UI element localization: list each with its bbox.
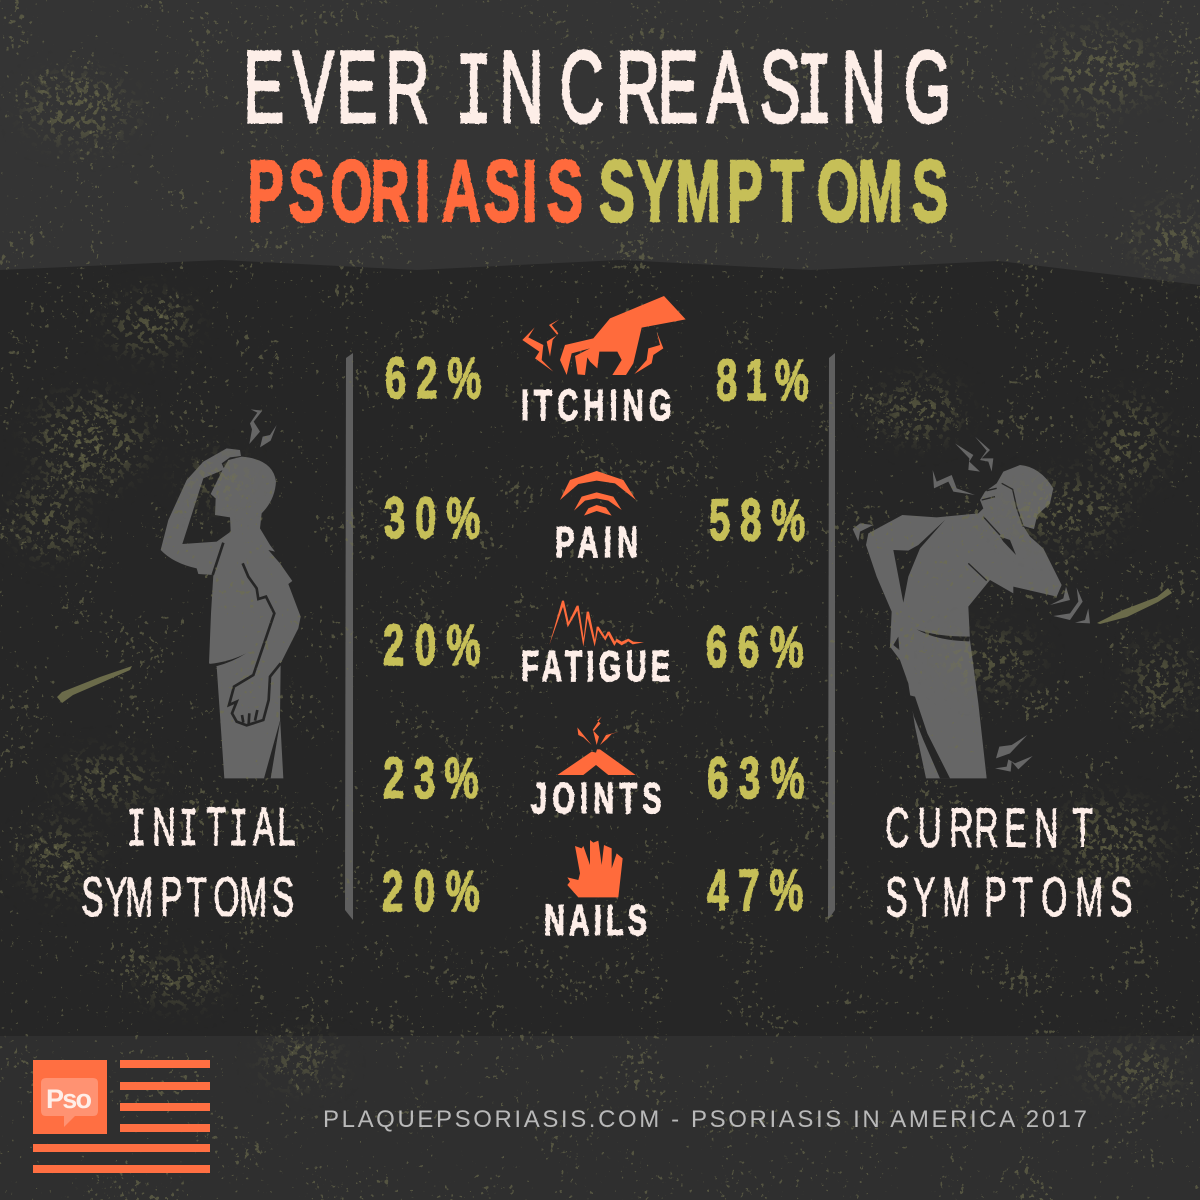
brush streak left [57,666,132,703]
figure: initial symptoms person [161,409,301,778]
initial percentages [382,347,481,924]
logo: flag [33,1060,210,1173]
title: ever increasing [243,30,951,154]
icon: joints volcano [557,717,636,775]
right divider bar [828,353,835,920]
heading: initial symptoms [81,798,295,928]
title: ever increasing: EVER [243,30,439,144]
left divider bar [345,353,353,920]
initial percentages: 20% [383,614,481,678]
heading: initial symptoms: SYMPTOMS [81,865,294,928]
title: psoriasis symptoms [248,143,948,240]
heading: current symptoms: CURRENT [885,796,1093,859]
label: fatigue: FATIGUE [521,641,670,690]
icon: pain waves [560,471,636,516]
initial percentages: 30% [384,487,480,551]
initial percentages: 20% [382,860,480,924]
title: psoriasis symptoms: PSORIASIS [248,143,587,240]
title: ever increasing: I [455,38,492,154]
label: joints: JOINTS [531,773,662,822]
heading: current symptoms [885,796,1132,928]
title: ever increasing: NCREAS [499,30,801,144]
figure: current symptoms person [853,437,1090,778]
heading: initial symptoms: N [152,798,176,857]
current percentages: 58% [709,489,805,553]
icon: fatigue zigzag [549,601,644,647]
initial percentages: 62% [385,347,481,411]
heading: initial symptoms: AL [253,798,295,857]
heading: initial symptoms: T [206,798,226,857]
heading: initial symptoms: I [127,801,146,862]
logo: flag: Pso [46,1084,92,1114]
current percentages [706,349,809,923]
initial percentages: 23% [383,747,479,811]
icon: itching hand [522,296,686,375]
heading: initial symptoms: I [179,801,198,862]
label: nails: NAILS [544,895,647,944]
label: itching: ITCHING [521,380,671,429]
title: psoriasis symptoms: SYMPTOMS [599,143,948,240]
current percentages: 63% [707,747,805,811]
label: pain: PAIN [555,517,638,566]
title: ever increasing: I [796,38,833,154]
top band [0,0,1200,285]
current percentages: 47% [707,859,803,923]
icon: nails hand [567,840,623,897]
footer source text: PLAQUEPSORIASIS.COM - PSORIASIS IN AMERICA 2017 [323,1106,1087,1133]
current percentages: 81% [716,349,809,413]
heading: initial symptoms: I [229,801,248,862]
footer band [0,1036,1200,1200]
heading: current symptoms: SYMPTOMS [885,865,1132,928]
title: ever increasing: NG [842,30,951,144]
brush streak right [1097,588,1172,624]
current percentages: 66% [706,616,804,680]
